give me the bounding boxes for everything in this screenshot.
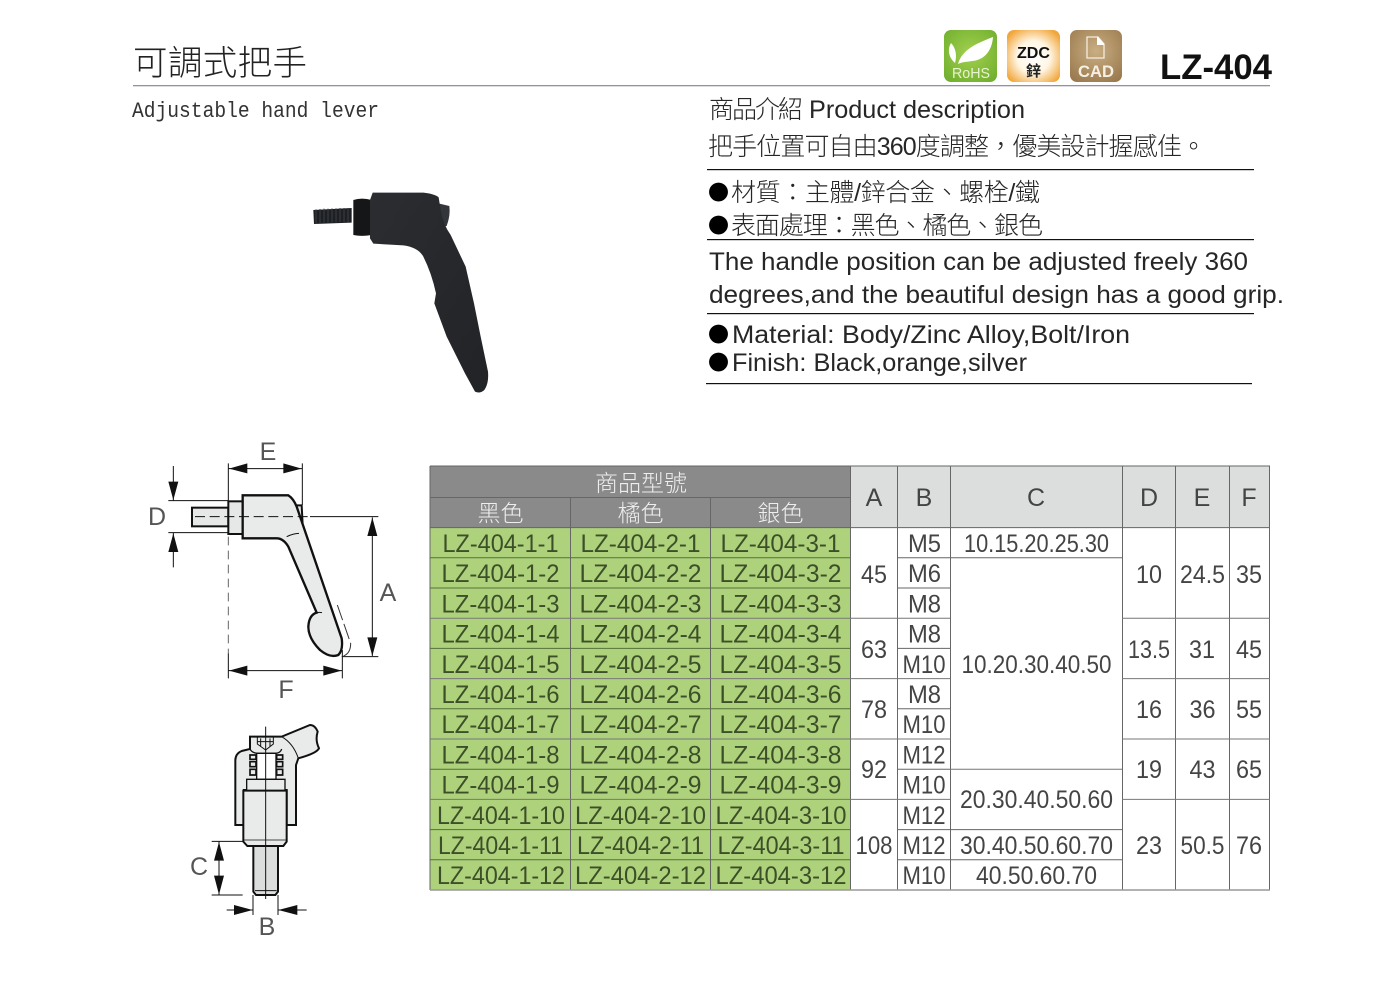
icon: ZDC zinc badge (1007, 30, 1060, 82)
column D values: 13.5 (1128, 636, 1170, 664)
column A values: 45 (861, 561, 887, 589)
column: black models: LZ-404-1-11 (438, 832, 563, 860)
model number column background (430, 528, 851, 890)
column: orange models: LZ-404-2-10 (575, 802, 706, 830)
column: black models: LZ-404-1-10 (437, 802, 565, 830)
column: orange models: LZ-404-2-4 (580, 621, 702, 649)
column: silver models: LZ-404-3-7 (720, 711, 842, 739)
specification table (430, 464, 1270, 890)
icon: RoHS badge: RoHS (952, 65, 990, 82)
column E values: 31 (1189, 636, 1215, 664)
description Chinese: 把手位置可自由360度調整，優美設計握感佳。 (708, 133, 1206, 161)
column B values: M12 (902, 832, 946, 860)
column F values: 55 (1236, 696, 1262, 724)
icon: RoHS badge (944, 30, 997, 82)
column B values: M5 (908, 530, 941, 558)
description heading (709, 96, 1025, 124)
icon: ZDC zinc badge: ZDC (1017, 45, 1050, 62)
column: silver models: LZ-404-3-5 (720, 651, 842, 679)
column A values: 108 (856, 832, 892, 860)
column F values: 35 (1236, 561, 1262, 589)
column C values: 30.40.50.60.70 (960, 832, 1113, 860)
product photo: black lever (313, 193, 488, 393)
description heading: 商品介紹 (709, 96, 803, 124)
header labels: 黑色 (478, 494, 524, 528)
column: orange models: LZ-404-2-1 (580, 530, 700, 558)
column E values: 50.5 (1180, 832, 1224, 860)
header labels: F (1241, 484, 1257, 512)
header labels: D (1140, 484, 1158, 512)
column B values: M8 (908, 681, 941, 709)
column: silver models: LZ-404-3-11 (718, 832, 844, 860)
column: black models: LZ-404-1-9 (442, 772, 560, 800)
column B values (902, 530, 946, 890)
column: orange models: LZ-404-2-6 (580, 681, 702, 709)
column: black models: LZ-404-1-4 (442, 621, 560, 649)
column: orange models: LZ-404-2-8 (580, 741, 702, 769)
header labels (478, 464, 1257, 528)
material Chinese: 材質：主體/鋅合金、螺栓/鐵 (731, 179, 1040, 207)
column: orange models: LZ-404-2-2 (580, 560, 702, 588)
column B values: M10 (902, 711, 946, 739)
column: black models: LZ-404-1-12 (437, 862, 565, 890)
header labels: C (1027, 484, 1045, 512)
icon: CAD badge: CAD (1078, 63, 1114, 81)
column: orange models (575, 530, 706, 890)
column B values: M6 (908, 560, 941, 588)
column D values (1128, 561, 1170, 860)
column: black models: LZ-404-1-5 (442, 651, 560, 679)
subtitle: Adjustable hand lever (132, 99, 379, 124)
column: black models: LZ-404-1-7 (442, 711, 560, 739)
column C values (960, 530, 1113, 890)
column B values: M10 (902, 651, 946, 679)
title: 可調式把手 (133, 35, 307, 85)
column F values: 76 (1236, 832, 1262, 860)
column B values: M12 (902, 802, 946, 830)
column C values: 10.15.20.25.30 (964, 530, 1109, 558)
column F values (1236, 561, 1262, 860)
column: silver models: LZ-404-3-8 (720, 741, 842, 769)
column C values: 10.20.30.40.50 (962, 651, 1112, 679)
column D values: 23 (1136, 832, 1162, 860)
column D values: 10 (1136, 561, 1162, 589)
column: silver models: LZ-404-3-6 (720, 681, 842, 709)
column: black models: LZ-404-1-6 (442, 681, 560, 709)
column: silver models: LZ-404-3-2 (720, 560, 842, 588)
header labels: 銀色 (758, 494, 804, 528)
column A values: 92 (861, 756, 887, 784)
description English line 2: degrees,and the beautiful design has a good grip. (709, 281, 1284, 309)
finish English: ● (708, 347, 729, 377)
dimension label B: B (259, 913, 275, 941)
column A values: 78 (861, 696, 887, 724)
column C values: 40.50.60.70 (976, 862, 1097, 890)
column C values: 20.30.40.50.60 (960, 786, 1113, 814)
header labels: A (866, 484, 883, 512)
icon: CAD badge (1070, 30, 1122, 82)
column: silver models: LZ-404-3-10 (716, 802, 846, 830)
technical drawing: front section view (190, 725, 319, 941)
dimension label D: D (148, 503, 166, 531)
column B values: M8 (908, 590, 941, 618)
technical drawing: side view (148, 438, 397, 704)
column: silver models: LZ-404-3-12 (716, 862, 846, 890)
column F values: 65 (1236, 756, 1262, 784)
column: orange models: LZ-404-2-5 (580, 651, 702, 679)
dimension label A: A (380, 579, 397, 607)
finish Chinese: ● (708, 210, 729, 240)
column: orange models: LZ-404-2-7 (580, 711, 702, 739)
column: black models: LZ-404-1-1 (442, 530, 558, 558)
header labels: 橘色 (618, 494, 664, 528)
header labels: B (916, 484, 932, 512)
icon: ZDC zinc badge: 鋅 (1026, 60, 1041, 81)
dimension label C: C (190, 853, 208, 881)
column D values: 19 (1136, 756, 1162, 784)
description heading: Product description (809, 96, 1025, 124)
column: silver models: LZ-404-3-9 (720, 772, 842, 800)
material Chinese: ● (708, 177, 729, 207)
column D values: 16 (1136, 696, 1162, 724)
column: orange models: LZ-404-2-11 (577, 832, 704, 860)
column: black models: LZ-404-1-2 (442, 560, 560, 588)
column: black models: LZ-404-1-3 (442, 590, 560, 618)
header rule (133, 85, 1270, 86)
model number: LZ-404 (1160, 47, 1272, 87)
header labels: E (1194, 484, 1210, 512)
dimension label E: E (260, 438, 276, 466)
finish English: Finish: Black,orange,silver (732, 349, 1027, 377)
column: silver models: LZ-404-3-3 (720, 590, 842, 618)
description English line 1: The handle position can be adjusted freely 360 (709, 248, 1248, 276)
column E values: 24.5 (1180, 561, 1225, 589)
dimension label F: F (278, 676, 294, 704)
column: silver models: LZ-404-3-4 (720, 621, 842, 649)
column E values: 36 (1190, 696, 1216, 724)
material English: ● (708, 319, 729, 349)
column B values: M10 (902, 862, 946, 890)
column: orange models: LZ-404-2-3 (580, 590, 702, 618)
column B values: M8 (908, 621, 941, 649)
column: silver models: LZ-404-3-1 (720, 530, 840, 558)
column: orange models: LZ-404-2-12 (575, 862, 706, 890)
column: silver models (716, 530, 846, 890)
column: orange models: LZ-404-2-9 (580, 772, 702, 800)
column A values: 63 (861, 636, 887, 664)
header labels: 商品型號 (595, 464, 687, 498)
column: black models: LZ-404-1-8 (442, 741, 560, 769)
column: black models (437, 530, 565, 890)
table header backgrounds (430, 466, 1270, 528)
column B values: M10 (902, 772, 946, 800)
finish Chinese: 表面處理：黑色、橘色、銀色 (731, 212, 1043, 240)
column B values: M12 (902, 741, 946, 769)
product description panel (706, 96, 1284, 384)
column F values: 45 (1236, 636, 1262, 664)
column E values: 43 (1190, 756, 1216, 784)
material English: Material: Body/Zinc Alloy,Bolt/Iron (732, 321, 1130, 349)
column A values (856, 561, 892, 860)
table grid (430, 466, 1270, 890)
column E values (1180, 561, 1225, 860)
